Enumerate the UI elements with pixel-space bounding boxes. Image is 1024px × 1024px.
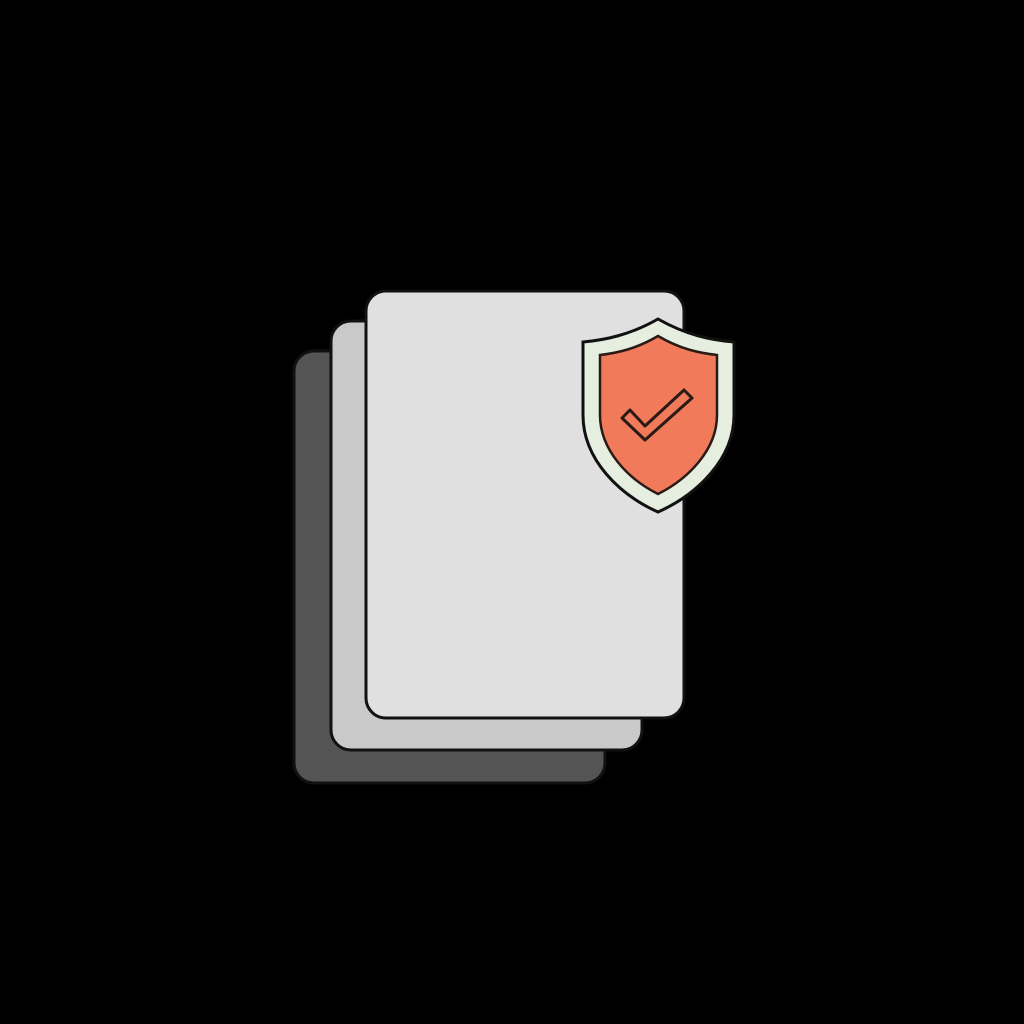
back card (294, 351, 605, 783)
front card (366, 291, 684, 718)
middle card (331, 321, 642, 750)
icon: shield with check (583, 319, 734, 512)
